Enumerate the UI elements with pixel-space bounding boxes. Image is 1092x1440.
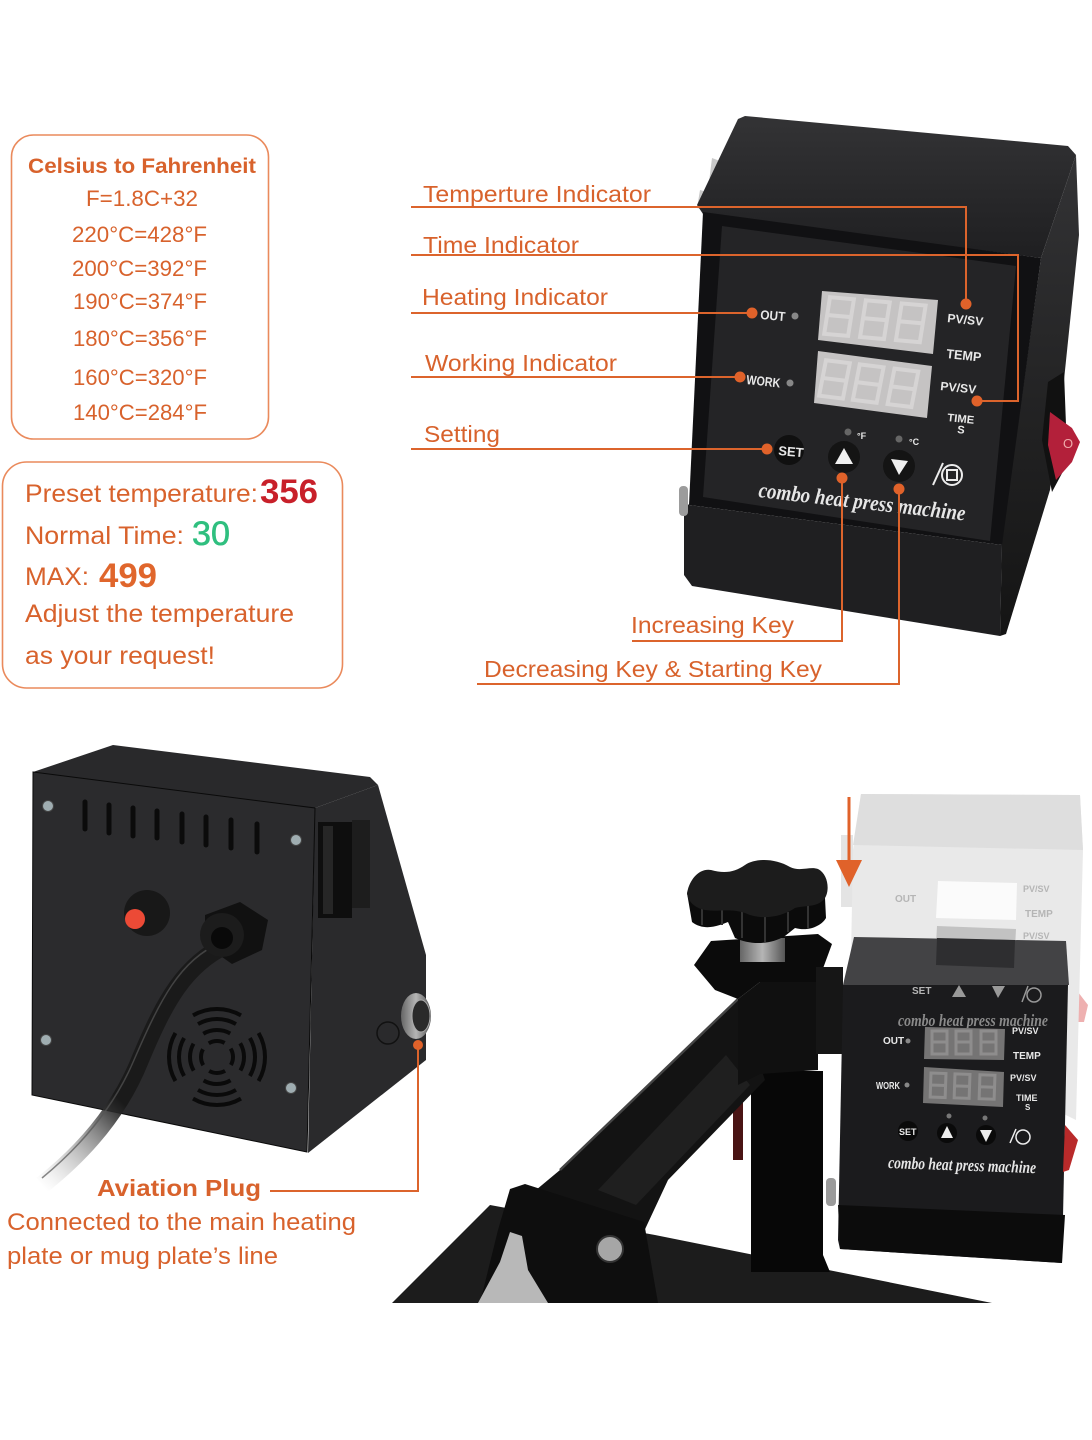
fuse button <box>124 890 170 936</box>
arm highlight <box>560 999 738 1170</box>
diagonal arm <box>530 999 765 1240</box>
button: set: SET <box>778 443 804 460</box>
sleeve <box>738 982 818 1085</box>
conversion list: 160°C=320°F <box>73 365 207 390</box>
panel labels: PV/SV <box>947 311 984 329</box>
labels <box>876 1026 1041 1120</box>
arrow: downward movement <box>836 797 862 887</box>
labels: TIME <box>1016 1093 1038 1103</box>
preset temperature <box>25 473 318 511</box>
panel labels: TEMP <box>946 346 982 365</box>
machine name: combo heat press machine <box>888 1153 1037 1177</box>
base plate <box>392 1205 992 1303</box>
description: aviation plug: Connected to the main heating <box>7 1209 356 1236</box>
button: up <box>828 441 860 473</box>
cable <box>42 943 226 1185</box>
label: heating indicator: Heating Indicator <box>422 284 608 310</box>
panel labels: TIME <box>947 412 975 427</box>
heading: aviation plug: Aviation Plug <box>97 1175 261 1201</box>
conversion list <box>72 186 207 425</box>
product: raised ghost box <box>841 794 1088 1120</box>
fan grille <box>169 1009 265 1105</box>
panel labels: PV/SV <box>940 379 977 397</box>
labels: S <box>1025 1103 1031 1112</box>
temperature display <box>818 291 938 354</box>
side clip <box>318 820 370 918</box>
power switch edge <box>1063 1125 1078 1172</box>
cable gland <box>200 902 268 964</box>
screws <box>40 800 302 1094</box>
power switch: O <box>1063 436 1073 451</box>
machine name: combo heat press machine <box>757 477 967 526</box>
ghost labels <box>888 884 1053 960</box>
max temperature <box>25 557 157 595</box>
callout dots <box>734 298 982 494</box>
labels: TEMP <box>1013 1051 1041 1062</box>
time display <box>923 1067 1004 1107</box>
adjustment note: Adjust the temperature <box>25 600 294 628</box>
conversion list: F=1.8C+32 <box>86 186 198 211</box>
normal time: 30 <box>192 515 230 553</box>
preset temperature: Preset temperature: <box>25 480 258 508</box>
pivot bracket <box>480 1184 658 1303</box>
panel: preset values <box>2 462 342 688</box>
conversion list: 180°C=356°F <box>73 326 207 351</box>
ghost temperature display <box>936 881 1017 920</box>
power logo <box>933 463 962 485</box>
front panel <box>703 226 1016 541</box>
right side <box>1000 155 1079 636</box>
side face <box>308 785 426 1153</box>
panel labels: OUT <box>760 307 786 324</box>
panel labels: °C <box>909 437 920 447</box>
conversion list: 140°C=284°F <box>73 400 207 425</box>
panel labels: S <box>957 424 965 437</box>
ghost labels: TIME <box>1027 950 1048 960</box>
ghost top face <box>853 794 1083 850</box>
product: control box on arm <box>816 937 1078 1263</box>
back plate <box>32 772 315 1152</box>
conversion list: 190°C=374°F <box>73 289 207 314</box>
label: increasing key: Increasing Key <box>631 612 795 638</box>
side screw <box>826 1178 836 1206</box>
preset temperature: 356 <box>260 473 318 511</box>
rear bracket <box>697 158 728 212</box>
label: setting: Setting <box>424 421 500 447</box>
ghost bracket <box>841 835 853 907</box>
description: aviation plug: plate or mug plate’s line <box>7 1243 278 1270</box>
top face <box>697 116 1076 258</box>
labels: OUT <box>883 1036 904 1047</box>
knob stem <box>740 938 785 962</box>
label: temperature indicator: Temperture Indicator <box>423 181 651 207</box>
aviation plug <box>377 993 431 1044</box>
conversion list: 220°C=428°F <box>72 222 207 247</box>
buttons: SET <box>899 1127 917 1137</box>
conversion list: 200°C=392°F <box>72 256 207 281</box>
post <box>751 1071 830 1272</box>
lower band <box>684 500 1002 636</box>
callout: indicator leader lines <box>411 207 1018 684</box>
button: set <box>774 435 804 465</box>
ghost controls over box <box>912 985 1041 1002</box>
front bezel <box>689 212 1041 545</box>
vent slots <box>85 802 257 852</box>
labels: PV/SV <box>1010 1073 1037 1083</box>
label: time indicator: Time Indicator <box>423 232 579 258</box>
ghost labels: PV/SV <box>1023 884 1050 894</box>
mount <box>816 967 843 1054</box>
max temperature: MAX: <box>25 563 89 591</box>
temperature display <box>924 1027 1005 1060</box>
ghost switch <box>1078 992 1088 1022</box>
ghost text over box: combo heat press machine <box>898 1011 1048 1030</box>
ghost labels: OUT <box>895 894 916 905</box>
callout: aviation plug leader <box>270 1040 423 1191</box>
power switch <box>1042 372 1080 492</box>
panel labels: °F <box>857 431 867 441</box>
product: arm and post <box>478 860 832 1303</box>
ghost labels: TEMP <box>1025 909 1053 920</box>
label: working indicator: Working Indicator <box>425 350 617 376</box>
ghost body <box>850 794 1083 1120</box>
ghost labels: PV/SV <box>1023 931 1050 941</box>
heading: Celsius to Fahrenheit: Celsius to Fahrenheit <box>28 154 256 178</box>
labels: WORK <box>876 1081 901 1092</box>
knob <box>687 860 828 943</box>
front <box>838 985 1068 1263</box>
head bracket <box>694 934 832 999</box>
top face <box>33 745 378 808</box>
post red reflection <box>733 1095 743 1160</box>
ghost display through top <box>936 938 1015 968</box>
ghost labels: WORK <box>888 939 920 950</box>
lower band <box>838 1205 1065 1263</box>
side screw <box>679 486 688 516</box>
panel labels: WORK <box>746 372 782 391</box>
arm inset <box>598 1055 750 1205</box>
bolt <box>597 1236 623 1262</box>
description: aviation plug <box>7 1209 356 1270</box>
labels: PV/SV <box>1012 1026 1039 1036</box>
max temperature: 499 <box>99 557 157 595</box>
product: rear of control box <box>32 745 431 1185</box>
top face <box>843 937 1069 985</box>
panel: Celsius to Fahrenheit conversions <box>12 135 268 439</box>
panel labels <box>746 307 984 447</box>
pivot link <box>478 1232 548 1303</box>
ghost time display <box>935 926 1016 968</box>
label: decreasing key: Decreasing Key & Starting Key <box>484 656 823 682</box>
time display <box>814 351 932 418</box>
ghost controls over box: SET <box>912 986 931 997</box>
normal time <box>25 515 230 553</box>
button: down <box>883 450 915 482</box>
normal time: Normal Time: <box>25 522 184 550</box>
adjustment note line 2: as your request! <box>25 642 215 670</box>
buttons <box>898 1121 1030 1145</box>
product: front control box <box>679 116 1080 636</box>
